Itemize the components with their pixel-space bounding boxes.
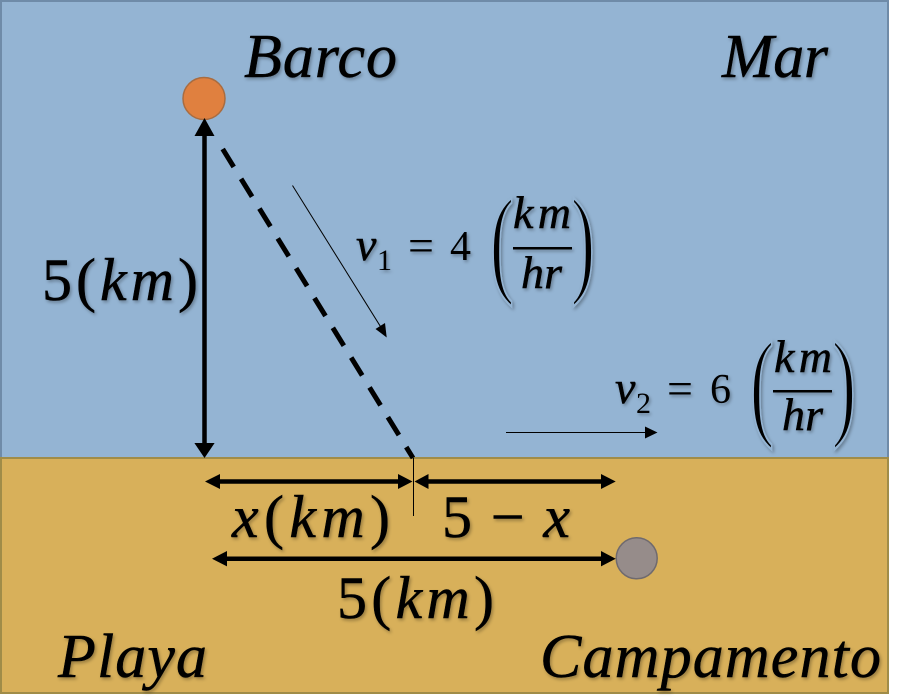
icon: camp point	[616, 538, 657, 579]
label: Mar: Mar	[721, 23, 829, 91]
formula: v2: )	[832, 318, 856, 451]
label: 5(km) vertical: 5(km)	[42, 247, 198, 313]
formula: v2: 2	[636, 387, 651, 420]
panel: sea	[1, 1, 888, 458]
formula: v1: (	[490, 175, 514, 308]
icon: boat point	[183, 78, 225, 120]
arrow: 5 km along beach	[212, 551, 616, 566]
formula: v2	[615, 318, 856, 451]
arrow: vertical 5 km distance	[194, 118, 215, 458]
label: 5 - x: 5 − x	[442, 484, 570, 550]
thin divider at landing point	[412, 458, 414, 516]
formula: v1: 4	[450, 224, 471, 270]
formula: v2: =	[667, 363, 693, 414]
formula: v1: v	[356, 219, 377, 270]
label: Campamento: Campamento	[540, 623, 881, 691]
arrow: x distance	[205, 474, 412, 489]
formula: v1: 1	[377, 244, 392, 277]
formula: v1: km	[513, 187, 571, 238]
label: 5(km) horizontal: 5(km)	[337, 565, 494, 631]
panel: beach	[1, 458, 888, 693]
formula: v1	[356, 175, 595, 308]
arrow: dashed boat path	[223, 149, 413, 458]
formula: v1: )	[571, 175, 595, 308]
arrow: 5 minus x distance	[414, 474, 616, 489]
formula: v2: 6	[710, 367, 731, 413]
label: Barco: Barco	[244, 23, 397, 91]
label: x(km): x(km)	[231, 484, 390, 550]
formula: v2: hr	[782, 389, 824, 440]
arrow: v1 direction	[292, 186, 387, 338]
formula: v2: (	[750, 318, 774, 451]
formula: v2: v	[615, 362, 636, 413]
formula: v1: hr	[521, 247, 563, 298]
arrow: v2 direction	[506, 426, 658, 438]
formula: v2: km	[774, 331, 832, 382]
label: Playa: Playa	[57, 623, 207, 691]
formula: v1: =	[408, 220, 434, 271]
